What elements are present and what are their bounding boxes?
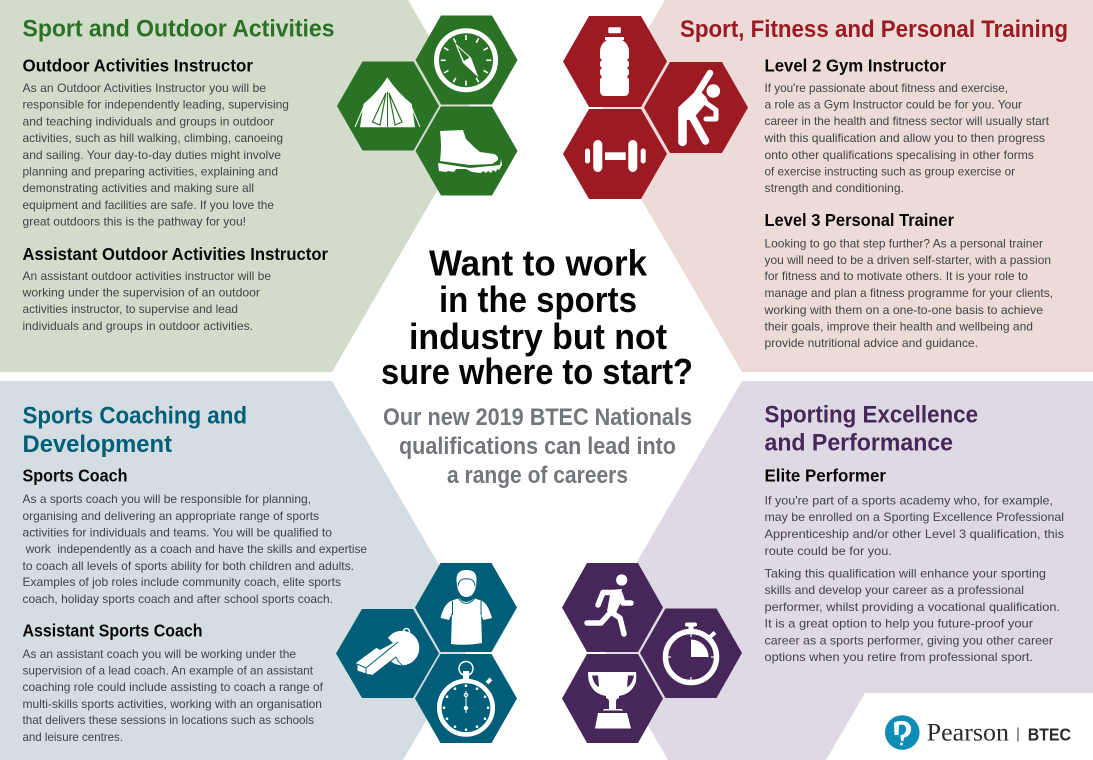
text block: Level 3 Personal Trainer description <box>763 236 1053 350</box>
text block: Outdoor Activities Instructor description <box>22 81 289 228</box>
text block: Elite Performer description part two: career as a sports performer, giving you other career <box>764 634 1053 648</box>
panel: Sport and Outdoor Activities <box>0 0 518 372</box>
text block: Elite Performer description part one: route could be for you. <box>764 544 892 558</box>
text block: Sports Coach description: to coach all levels of sports ability for both children and adults. <box>22 559 354 573</box>
heading: Sports Coaching and Development: Sports Coaching and <box>22 402 247 429</box>
panel background: green <box>0 0 478 372</box>
text block: Level 2 Gym Instructor description: onto other qualifications specalising in other forms <box>764 148 1034 162</box>
text block: Outdoor Activities Instructor description: equipment and facilities are safe. If you love the <box>22 198 274 212</box>
text block: Elite Performer description part two <box>764 566 1060 664</box>
subtitle: Our new 2019 BTEC Nationals qualifications: a range of careers <box>447 462 628 489</box>
title: Want to work in the sports industry but not sure where to start?: industry but not <box>409 316 667 357</box>
text block: Elite Performer description part one <box>764 493 1064 558</box>
text block: Elite Performer description part two: skills and develop your career as a professional <box>764 583 1024 597</box>
text block: Assistant Sports Coach description: coaching role could include assisting to coach a range of <box>22 680 324 694</box>
text block: Assistant Outdoor Activities Instructor description: working under the supervision of an outdoor <box>21 286 260 300</box>
text block: Outdoor Activities Instructor description: demonstrating activities and making sure all <box>22 181 254 195</box>
subtitle: Our new 2019 BTEC Nationals qualifications: qualifications can lead into <box>399 433 676 460</box>
icon: trophy <box>562 654 663 743</box>
panel background: red <box>595 0 1093 372</box>
icon: dumbbell <box>563 109 667 199</box>
text block: Level 2 Gym Instructor description: of exercise instructing such as group exercise or <box>764 164 1015 178</box>
text block: Sports Coach description: activities for individuals and teams. You will be qualified to <box>22 526 332 540</box>
text block: Outdoor Activities Instructor description: great outdoors this is the pathway for you! <box>22 214 246 228</box>
text block: Outdoor Activities Instructor description: and teaching individuals and groups in outdoor <box>22 114 274 128</box>
text block: Sports Coach description: As a sports coach you will be responsible for planning, <box>22 492 311 506</box>
title: Want to work in the sports industry but not sure where to start?: Want to work <box>429 243 648 284</box>
panel: Sport, Fitness and Personal Training <box>563 0 1093 372</box>
heading: Sports Coaching and Development <box>22 402 247 458</box>
title: Want to work in the sports industry but not sure where to start? <box>381 243 693 392</box>
text block: Outdoor Activities Instructor description: As an Outdoor Activities Instructor you will be <box>22 81 266 95</box>
icon: tent <box>337 62 439 150</box>
icon: stretching figure <box>644 62 748 153</box>
text block: Outdoor Activities Instructor description: planning and preparing activities, explaining and <box>22 164 278 178</box>
text block: Sports Coach description: organising and delivering an appropriate range of sports <box>22 509 319 523</box>
title: Want to work in the sports industry but not sure where to start?: in the sports <box>439 279 637 320</box>
text block: Elite Performer description part two: Taking this qualification will enhance your sporting <box>764 566 1046 580</box>
job heading: Assistant Sports Coach: Assistant Sports Coach <box>22 621 202 641</box>
text block: Elite Performer description part one: If you're part of a sports academy who, for example, <box>764 493 1053 507</box>
text block: Assistant Outdoor Activities Instructor description: An assistant outdoor activities instructor will be <box>22 269 271 283</box>
text block: Assistant Sports Coach description: supervision of a lead coach. An example of an assistant <box>22 664 314 678</box>
subtitle: Our new 2019 BTEC Nationals qualifications <box>383 404 692 489</box>
text block: Level 2 Gym Instructor description: career in the health and fitness sector will usually start <box>764 114 1050 128</box>
text block: Assistant Sports Coach description: and leisure centres. <box>22 730 123 744</box>
heading: Sporting Excellence and Performance: Sporting Excellence <box>764 402 978 429</box>
panel background: teal <box>0 381 478 760</box>
icon: walking boot <box>416 106 518 196</box>
job heading: Assistant Outdoor Activities Instructor: Assistant Outdoor Activities Instructor <box>22 244 328 264</box>
icon: whistle <box>336 609 439 698</box>
text block: Level 2 Gym Instructor description: a role as a Gym Instructor could be for you. Your <box>764 98 1022 112</box>
text block: Assistant Sports Coach description: As an assistant coach you will be working under the <box>22 647 296 661</box>
wordmark: BTEC: BTEC <box>1028 724 1071 744</box>
text block: Sports Coach description <box>22 492 367 606</box>
text block: Assistant Outdoor Activities Instructor description <box>21 269 271 333</box>
text block: Elite Performer description part one: may be enrolled on a Sporting Excellence Professional <box>764 510 1064 524</box>
job heading: Outdoor Activities Instructor: Outdoor Activities Instructor <box>22 56 253 76</box>
text block: Elite Performer description part two: performer, whilst providing a vocational qualification. <box>764 600 1060 614</box>
subtitle: Our new 2019 BTEC Nationals qualifications: Our new 2019 BTEC Nationals <box>383 404 692 431</box>
heading: Sport and Outdoor Activities: Sport and Outdoor Activities <box>22 16 334 43</box>
text block: Elite Performer description part two: options when you retire from professional sport. <box>764 650 1033 664</box>
text block: Level 3 Personal Trainer description: manage and plan a fitness programme for your clients, <box>764 286 1053 300</box>
logo: Pearson BTEC <box>885 715 1071 750</box>
heading: Sport, Fitness and Personal Training: Sport, Fitness and Personal Training <box>680 16 1068 43</box>
icon: stopwatch <box>415 654 517 743</box>
panel background: purple <box>595 381 1093 760</box>
text block: Level 3 Personal Trainer description: for fitness and to motivate others. It is your role to <box>764 269 1028 283</box>
text block: Level 2 Gym Instructor description <box>763 81 1050 195</box>
icon: runner <box>562 563 663 652</box>
text block: Level 3 Personal Trainer description: their goals, improve their health and wellbeing and <box>764 320 1033 334</box>
icon: athlete in vest <box>415 563 517 652</box>
icon: water bottle <box>563 16 667 107</box>
panel: Sporting Excellence and Performance <box>562 381 1093 760</box>
job heading: Level 3 Personal Trainer: Level 3 Personal Trainer <box>764 210 954 230</box>
text block: Assistant Sports Coach description: multi-skills sports activities, working with an organisation <box>22 697 322 711</box>
text block: Level 3 Personal Trainer description: you will need to be a driven self-starter, with a passion <box>764 253 1051 267</box>
text block: Assistant Outdoor Activities Instructor description: individuals and groups in outdoor activities. <box>22 319 253 333</box>
text block: Level 2 Gym Instructor description: If you're passionate about fitness and exercise, <box>764 81 1008 95</box>
wordmark: Pearson: Pearson <box>927 720 1010 747</box>
job heading: Elite Performer: Elite Performer <box>764 466 886 486</box>
logo mark <box>885 715 920 750</box>
text block: Level 2 Gym Instructor description: with this qualification and allow you to then progress <box>763 131 1045 145</box>
text block: Sports Coach description: coach, holiday sports coach and after school sports coach. <box>22 592 333 606</box>
icon: stopwatch with quarter wedge <box>640 608 742 698</box>
heading: Sporting Excellence and Performance: and Performance <box>764 430 953 457</box>
job heading: Level 2 Gym Instructor: Level 2 Gym Instructor <box>764 56 946 76</box>
panel: Sports Coaching and Development <box>0 381 517 760</box>
job heading: Sports Coach: Sports Coach <box>22 466 128 486</box>
icon: compass <box>416 16 518 104</box>
text block: Assistant Sports Coach description: that delivers these sessions in locations such as schools <box>22 713 314 727</box>
text block: Outdoor Activities Instructor description: and sailing. Your day-to-day duties might involve <box>22 148 281 162</box>
text block: Outdoor Activities Instructor description: activities, such as hill walking, climbing, canoeing <box>22 131 283 145</box>
text block: Sports Coach description: Examples of job roles include community coach, elite sports <box>22 575 341 589</box>
text block: Outdoor Activities Instructor description: responsible for independently leading, supervising <box>22 98 289 112</box>
text block: Assistant Outdoor Activities Instructor description: activities instructor, to supervise and lead <box>22 302 238 316</box>
text block: Sports Coach description: work independently as a coach and have the skills and expertise <box>25 542 367 556</box>
heading: Sporting Excellence and Performance <box>764 402 978 457</box>
text block: Level 2 Gym Instructor description: strength and conditioning. <box>764 181 904 195</box>
text block: Level 3 Personal Trainer description: working with them on a one-to-one basis to achieve <box>763 303 1043 317</box>
text block: Level 3 Personal Trainer description: provide nutritional advice and guidance. <box>764 336 978 350</box>
text block: Assistant Sports Coach description <box>22 647 324 744</box>
title: Want to work in the sports industry but not sure where to start?: sure where to start? <box>381 351 693 392</box>
text block: Elite Performer description part two: It is a great option to help you future-proof your <box>764 616 1033 630</box>
heading: Sports Coaching and Development: Development <box>22 431 172 458</box>
text block: Level 3 Personal Trainer description: Looking to go that step further? As a personal trainer <box>764 236 1043 250</box>
text block: Elite Performer description part one: Apprenticeship and/or other Level 3 qualification, this <box>764 527 1064 541</box>
